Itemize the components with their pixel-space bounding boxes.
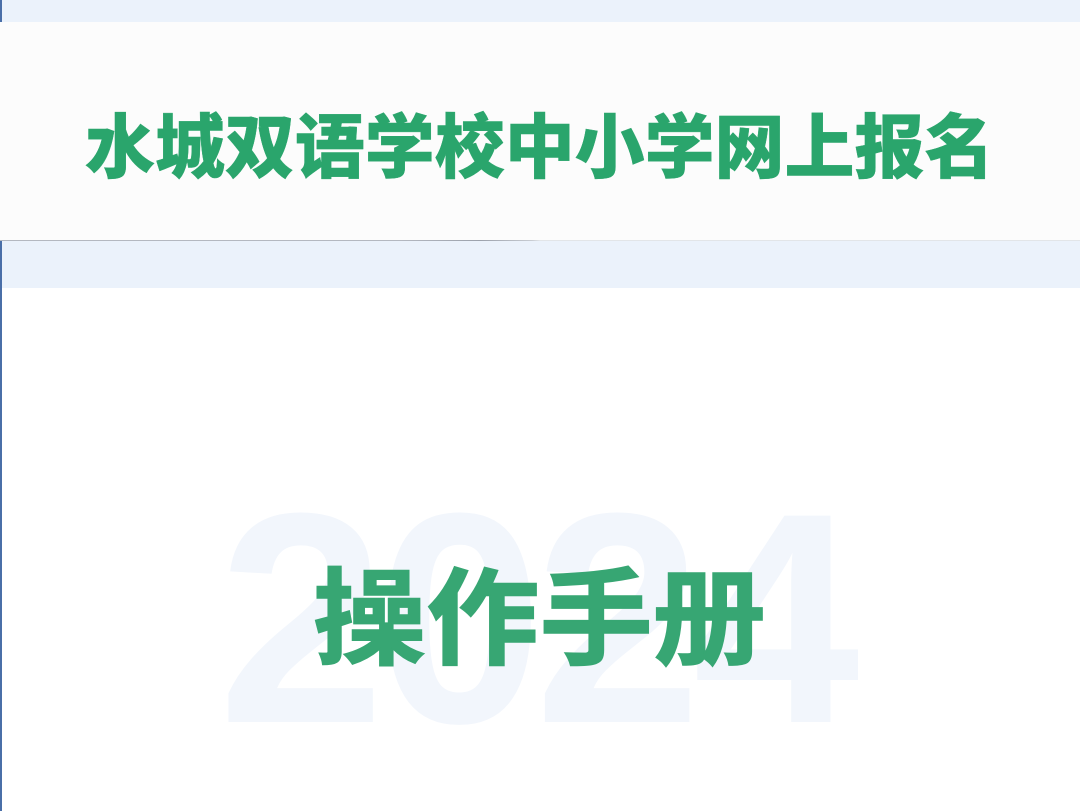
title panel xyxy=(0,22,1080,241)
subtitle: 操作手册 xyxy=(313,561,766,678)
left blue edge line xyxy=(0,0,2,811)
top pale blue band xyxy=(0,0,1080,22)
watermark year 2024: 2024 xyxy=(218,450,851,786)
panel bottom shadow line xyxy=(0,240,1080,241)
title: 水城双语学校中小学网上报名 xyxy=(85,109,994,187)
lower pale blue band xyxy=(0,241,1080,288)
